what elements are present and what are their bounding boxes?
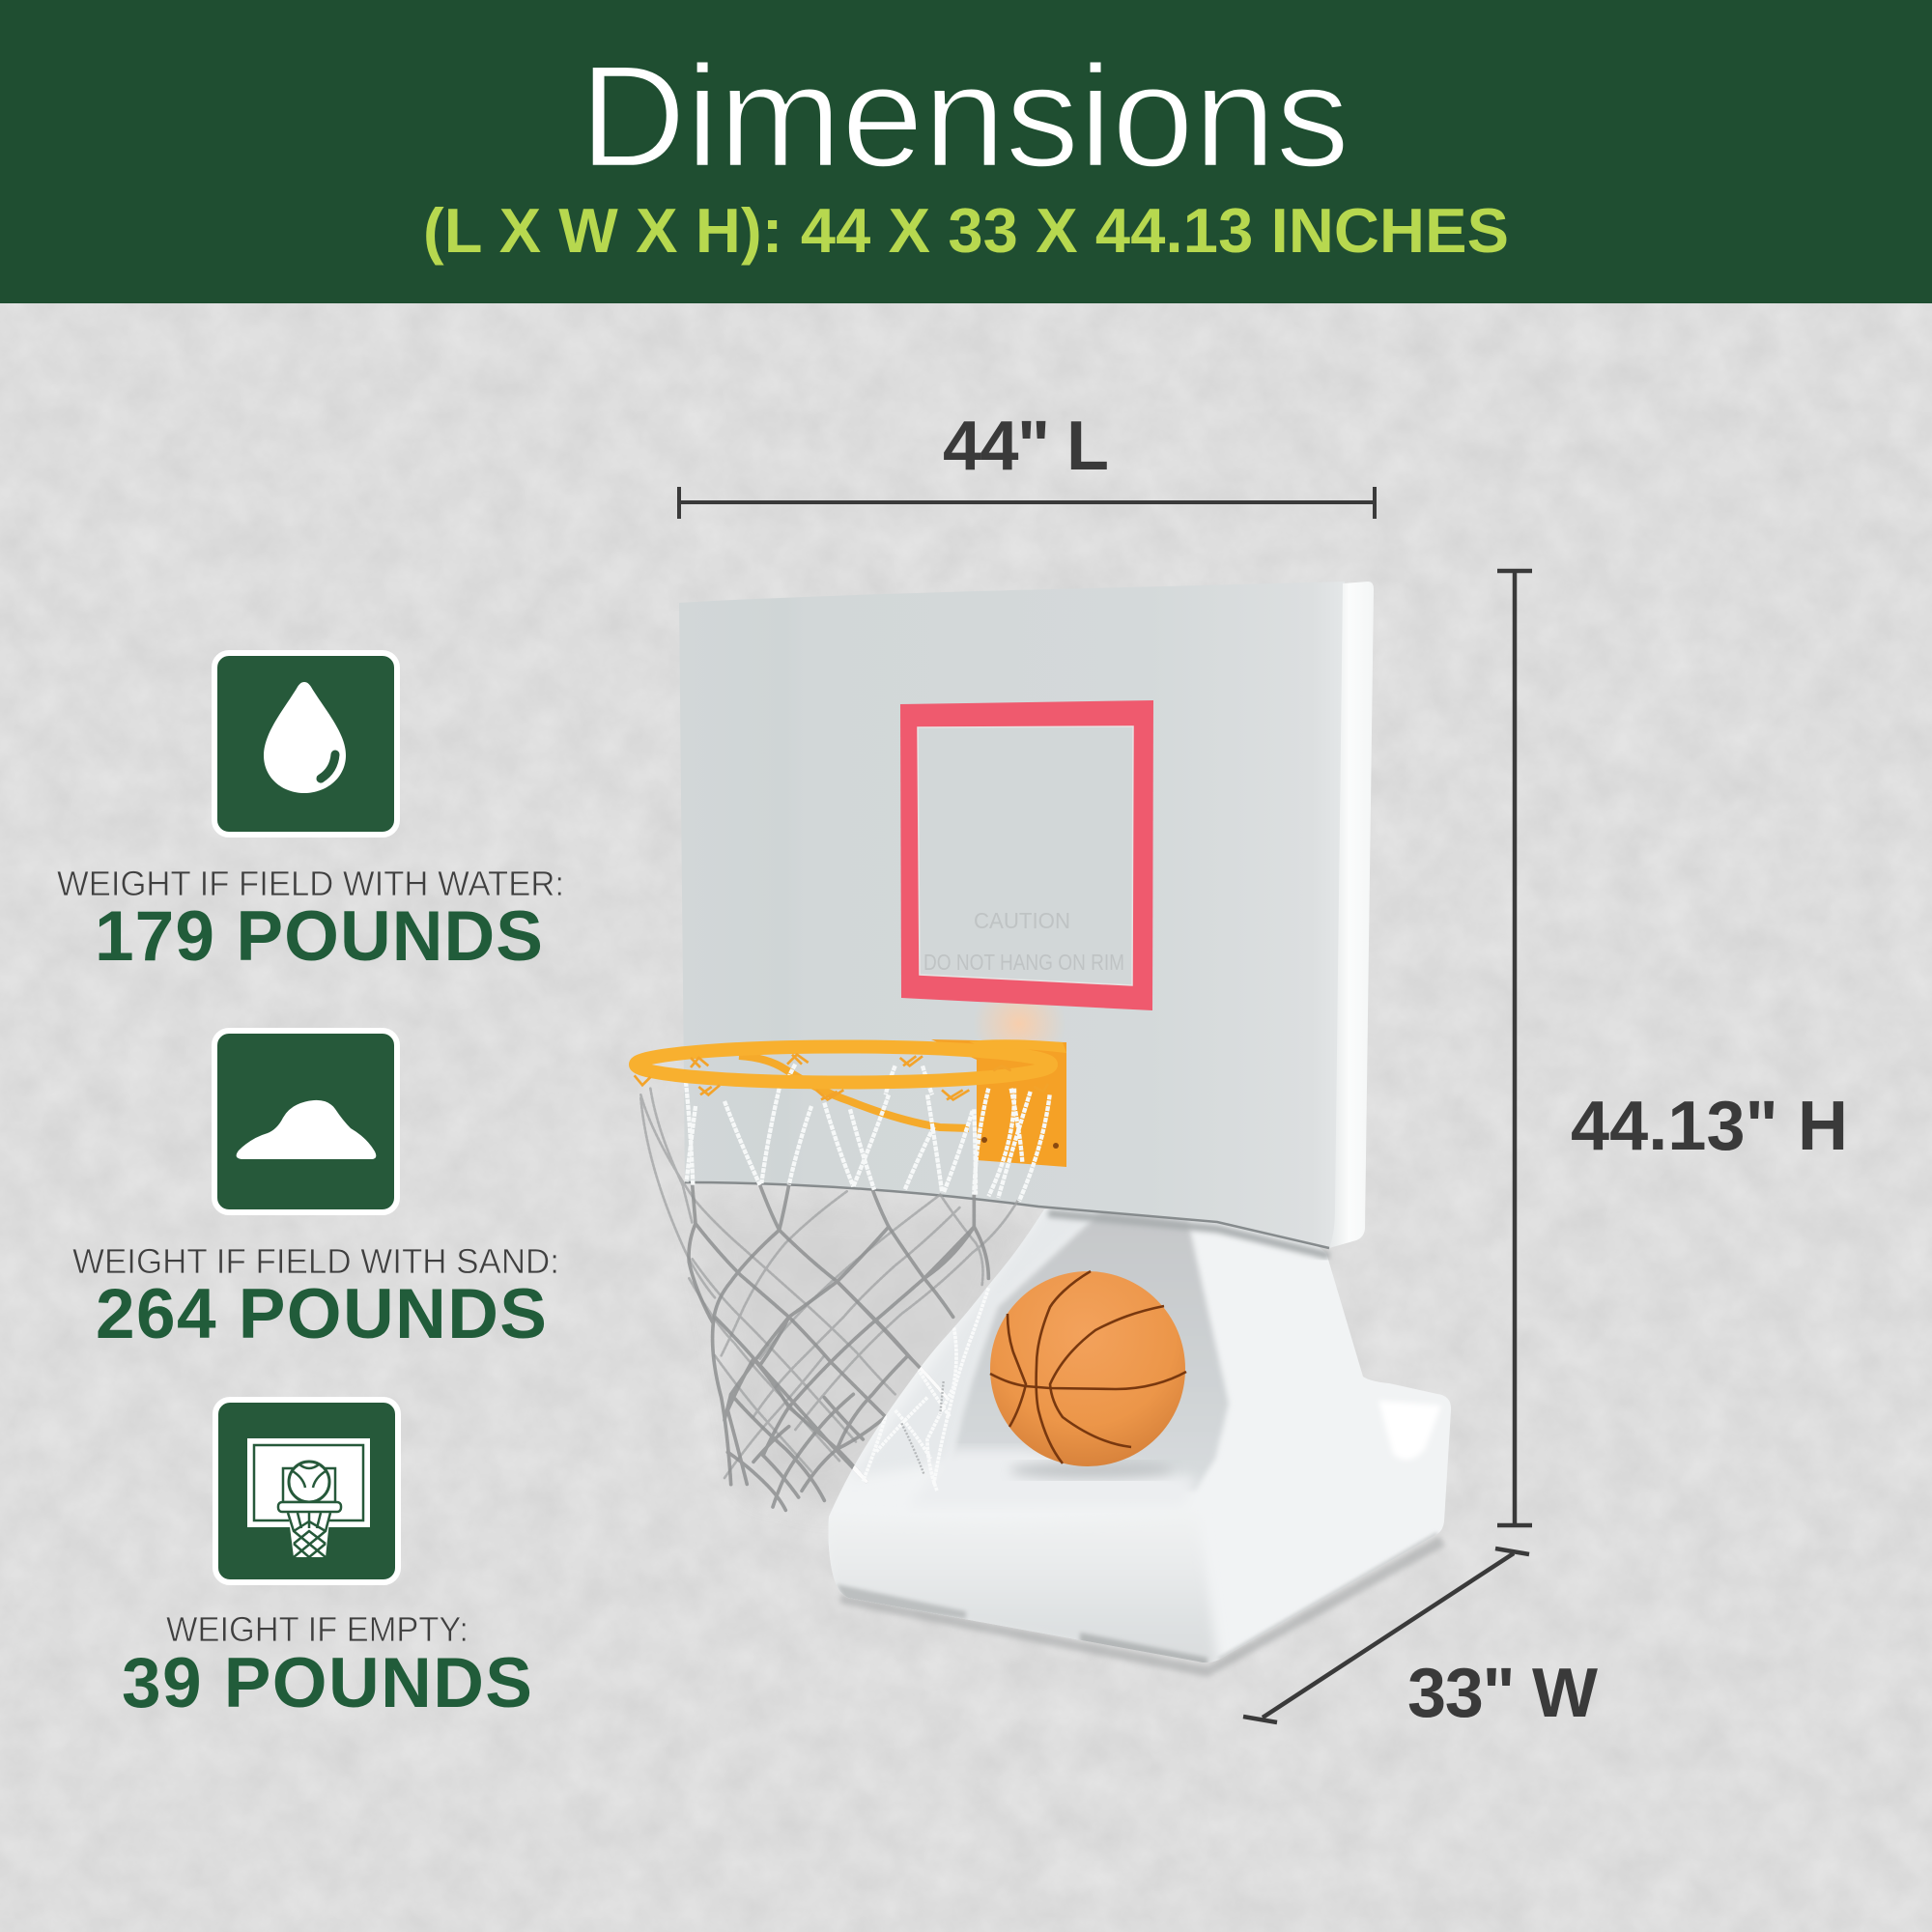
product: poolside basketball hoop [635, 582, 1468, 1677]
soft wall shading behind the net [696, 1198, 1043, 1507]
dimension: height: 44.13" H [1571, 1088, 1848, 1165]
base: recessed cavity [952, 1209, 1229, 1491]
backboard: right side strip [1329, 582, 1374, 1248]
backboard: inner white-grey square [918, 726, 1133, 985]
value: 39 pounds: 39 POUNDS [122, 1644, 532, 1722]
base: cavity floor [952, 1447, 1194, 1490]
backboard shadow on base [1048, 1213, 1329, 1256]
base: right edge shadow [1219, 1534, 1437, 1660]
backboard: glow above rim [973, 980, 1065, 1068]
base [829, 1209, 1451, 1662]
hoop: orange mounting bracket [931, 1039, 1066, 1167]
weight stat: empty [122, 1400, 532, 1722]
base: bottom edge strips [837, 1584, 966, 1619]
value: 179 pounds: 179 POUNDS [95, 897, 543, 976]
backboard [679, 582, 1374, 1248]
base: right highlight [1381, 1403, 1438, 1459]
base: ball contact shadow [1009, 1462, 1174, 1479]
title: Dimensions [580, 35, 1350, 197]
label: weight with sand: WEIGHT IF FIELD WITH SAND: [72, 1241, 559, 1281]
icon: sand pile [214, 1031, 397, 1212]
label: weight with water: WEIGHT IF FIELD WITH WATER: [57, 864, 564, 903]
backboard: embossed caution text [923, 908, 1124, 975]
weight stat: water [57, 653, 564, 976]
net [640, 1065, 1050, 1510]
subtitle: overall dimensions: (L X W X H): 44 X 33 X 44.13 INCHES [423, 195, 1509, 266]
dimension: height [1497, 570, 1848, 1525]
dimension: width: 33" W [1407, 1655, 1598, 1732]
label: weight if empty: WEIGHT IF EMPTY: [166, 1609, 469, 1649]
base: front lower face [834, 1567, 1219, 1662]
hoop: net hooks [635, 1055, 1048, 1099]
backboard: red target square [900, 700, 1153, 1010]
header banner [0, 0, 1932, 303]
dimension: length: 44" L [943, 408, 1109, 485]
backboard: embossed caution text: DO NOT HANG ON RIM [923, 950, 1124, 975]
value: 264 pounds: 264 POUNDS [96, 1275, 547, 1353]
basketball [990, 1271, 1186, 1466]
net: grey strands over the wall [640, 1089, 1017, 1510]
icon: backboard and hoop [215, 1400, 398, 1582]
hoop: rim ring [635, 1039, 1066, 1099]
net: white strands over the backboard [686, 1065, 1050, 1201]
cast shadow under base [840, 1536, 1445, 1677]
icon: water drop [214, 653, 397, 835]
dimension: length [679, 408, 1375, 519]
weight stat: sand [72, 1031, 559, 1353]
dimension: width [1243, 1548, 1598, 1732]
backboard: embossed caution text: CAUTION [974, 908, 1070, 933]
net: white strands over the base [852, 1288, 990, 1492]
base: shaded arm along the arc [865, 1217, 1080, 1470]
backboard: lower edge line [685, 1182, 1329, 1248]
hoop: rear brace [739, 1056, 969, 1128]
